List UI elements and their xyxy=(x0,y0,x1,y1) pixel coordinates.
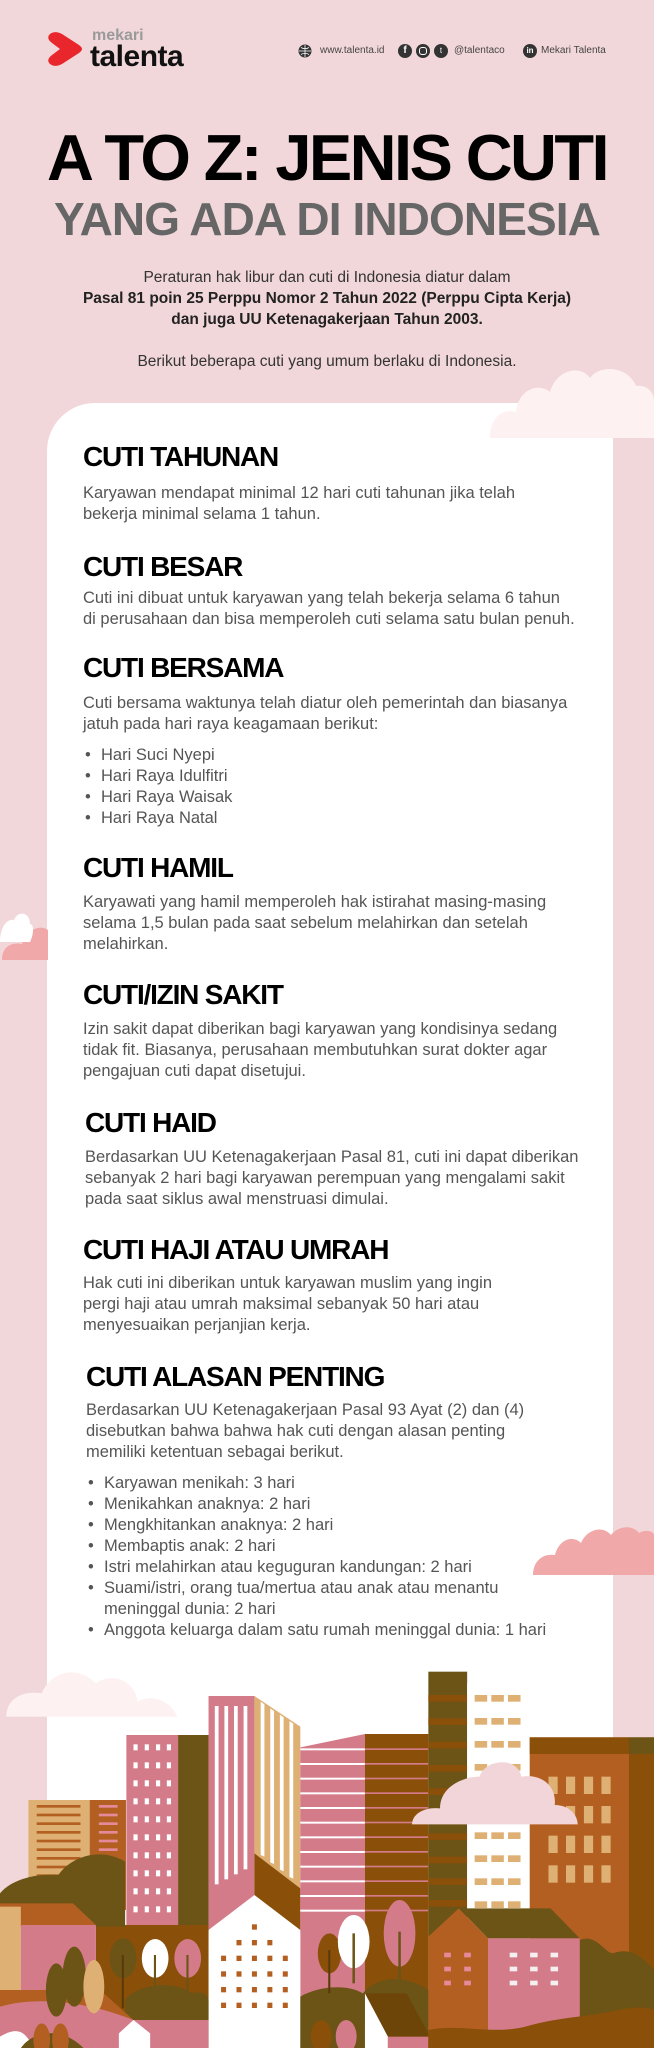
heading: cuti alasan penting: CUTI ALASAN PENTING xyxy=(86,1361,384,1392)
text: cuti izin sakit: tidak fit. Biasanya, perusahaan membutuhkan surat dokter agar xyxy=(83,1041,547,1059)
text: cuti haji: pergi haji atau umrah maksimal sebanyak 50 hari atau xyxy=(83,1295,479,1313)
cloud: left middle xyxy=(0,914,48,960)
intro text: Berikut beberapa cuti yang umum berlaku di Indonesia. xyxy=(137,353,517,370)
text: cuti haid: Berdasarkan UU Ketenagakerjaan Pasal 81, cuti ini dapat diberikan xyxy=(85,1148,578,1166)
text: cuti besar: di perusahaan dan bisa memperoleh cuti selama satu bulan penuh. xyxy=(83,610,575,628)
heading: cuti besar: CUTI BESAR xyxy=(83,551,242,582)
header contacts: www.talenta.id xyxy=(320,45,384,56)
heading: cuti haid: CUTI HAID xyxy=(85,1107,216,1138)
illustration: city skyline xyxy=(0,1672,654,2048)
text: cuti haji: menyesuaikan perjanjian kerja. xyxy=(83,1316,310,1334)
text: cuti besar: Cuti ini dibuat untuk karyawan yang telah bekerja selama 6 tahun xyxy=(83,589,560,607)
text: cuti izin sakit: pengajuan cuti dapat disetujui. xyxy=(83,1062,306,1080)
text: cuti bersama: Hari Raya Natal xyxy=(101,809,217,827)
text: cuti haji xyxy=(83,1274,492,1334)
title xyxy=(47,121,607,245)
text: cuti alasan penting: Membaptis anak: 2 hari xyxy=(104,1537,276,1555)
text: cuti besar xyxy=(83,589,575,628)
icon: linkedin xyxy=(523,44,537,58)
text: cuti izin sakit xyxy=(83,1020,557,1080)
text: cuti alasan penting: Mengkhitankan anaknya: 2 hari xyxy=(104,1516,333,1534)
heading: cuti tahunan: CUTI TAHUNAN xyxy=(83,441,278,472)
text: cuti bersama: Hari Raya Waisak xyxy=(101,788,232,806)
icon: red arrow xyxy=(48,32,82,66)
text: cuti bersama: Cuti bersama waktunya telah diatur oleh pemerintah dan biasanya xyxy=(83,694,567,712)
text: cuti haid: sebanyak 2 hari bagi karyawan perempuan yang mengalami sakit xyxy=(85,1169,565,1187)
text: cuti alasan penting: Menikahkan anaknya: 2 hari xyxy=(104,1495,310,1513)
logo: mekari talenta xyxy=(48,27,184,73)
text: cuti hamil xyxy=(83,893,546,953)
cloud: right lower xyxy=(533,1527,654,1575)
text: cuti bersama: Hari Suci Nyepi xyxy=(101,746,215,764)
header contacts xyxy=(298,44,606,58)
text: cuti bersama: Hari Raya Idulfitri xyxy=(101,767,228,785)
text: cuti alasan penting: Berdasarkan UU Ketenagakerjaan Pasal 93 Ayat (2) dan (4) xyxy=(86,1401,524,1419)
text: cuti alasan penting: memiliki ketentuan sebagai berikut. xyxy=(86,1443,344,1461)
text: cuti haid xyxy=(85,1148,578,1208)
panel: white content card xyxy=(47,403,613,2048)
icon: globe xyxy=(298,44,312,58)
heading: cuti izin sakit: CUTI/IZIN SAKIT xyxy=(83,979,283,1010)
intro text xyxy=(83,269,571,370)
text: cuti alasan penting: Karyawan menikah: 3 hari xyxy=(104,1474,295,1492)
logo: mekari talenta: talenta xyxy=(90,40,183,73)
text: cuti haji: Hak cuti ini diberikan untuk karyawan muslim yang ingin xyxy=(83,1274,492,1292)
text: cuti alasan penting: Istri melahirkan atau keguguran kandungan: 2 hari xyxy=(104,1558,472,1576)
cloud: top right xyxy=(490,369,654,438)
text: cuti tahunan: Karyawan mendapat minimal 12 hari cuti tahunan jika telah xyxy=(83,484,515,502)
heading: cuti haji: CUTI HAJI ATAU UMRAH xyxy=(83,1234,388,1265)
intro text: Pasal 81 poin 25 Perppu Nomor 2 Tahun 2022 (Perppu Cipta Kerja) xyxy=(83,290,571,307)
intro text: dan juga UU Ketenagakerjaan Tahun 2003. xyxy=(171,311,483,328)
icons: social xyxy=(398,44,448,58)
header contacts: @talentaco xyxy=(454,45,505,56)
text: cuti tahunan: bekerja minimal selama 1 tahun. xyxy=(83,505,321,523)
header contacts: Mekari Talenta xyxy=(541,45,606,56)
icon: linkedin: in xyxy=(526,46,534,55)
intro text: Peraturan hak libur dan cuti di Indonesia diatur dalam xyxy=(143,269,511,286)
text: cuti hamil: selama 1,5 bulan pada saat sebelum melahirkan dan setelah xyxy=(83,914,528,932)
text: cuti hamil: Karyawati yang hamil memperoleh hak istirahat masing-masing xyxy=(83,893,546,911)
text: cuti izin sakit: Izin sakit dapat diberikan bagi karyawan yang kondisinya sedang xyxy=(83,1020,557,1038)
title: YANG ADA DI INDONESIA xyxy=(54,193,600,245)
heading: cuti bersama: CUTI BERSAMA xyxy=(83,652,283,683)
text: cuti alasan penting: Suami/istri, orang tua/mertua atau anak atau menantu xyxy=(104,1579,498,1597)
title: A TO Z: JENIS CUTI xyxy=(47,121,607,194)
text: cuti alasan penting: Anggota keluarga dalam satu rumah meninggal dunia: 1 hari xyxy=(104,1621,546,1639)
text: cuti alasan penting xyxy=(86,1401,546,1639)
text: cuti bersama xyxy=(82,694,568,827)
text: cuti alasan penting: meninggal dunia: 2 hari xyxy=(104,1600,276,1618)
icons: social: f xyxy=(403,45,407,56)
icons: social: t xyxy=(440,46,442,55)
text: cuti tahunan xyxy=(83,484,515,523)
text: cuti hamil: melahirkan. xyxy=(83,935,168,953)
text: cuti bersama: jatuh pada hari raya keagamaan berikut: xyxy=(83,715,378,733)
text: cuti haid: pada saat siklus awal menstruasi dimulai. xyxy=(85,1190,389,1208)
heading: cuti hamil: CUTI HAMIL xyxy=(83,852,233,883)
text: cuti alasan penting: disebutkan bahwa bahwa hak cuti dengan alasan penting xyxy=(86,1422,505,1440)
text: mekari: mekari xyxy=(92,27,144,44)
